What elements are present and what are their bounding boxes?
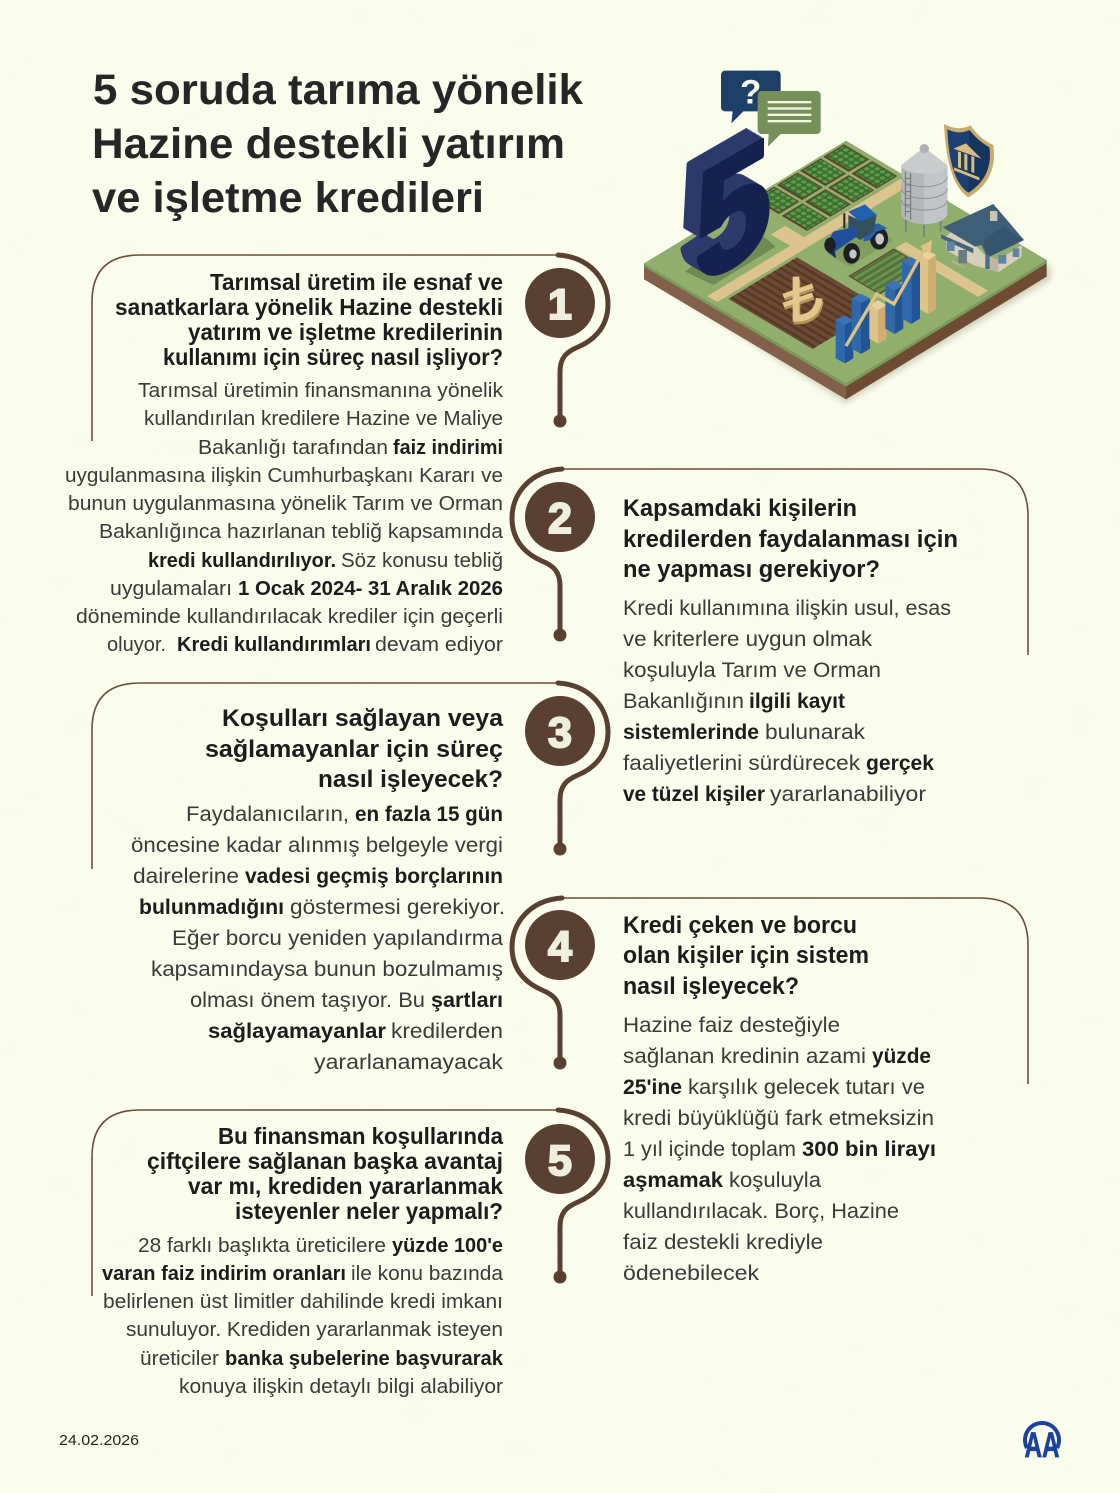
number five: 5 [678,92,755,311]
question 3: Koşulları sağlayan veya [222,705,504,732]
frame 2 [512,469,1028,655]
question 4 [623,912,869,1000]
small front wheel [824,238,836,252]
question 5: Bu finansman koşullarında [218,1123,503,1149]
question 4: olan kişiler için sistem [623,942,869,969]
answer 1: Kredi kullandırımları [177,634,371,656]
answer 3: olması önem taşıyor. Bu [190,989,425,1012]
answer 2: ve kriterlere uygun olmak [623,628,873,651]
hood [827,227,857,252]
badge 1 [525,268,595,338]
answer 1: Söz konusu tebliğ [341,550,503,572]
number five: 5 [680,94,757,312]
answer 5: konuya ilişkin detaylı bilgi alabiliyor [179,1376,503,1398]
answer 3 [131,803,505,1074]
question 1: Tarımsal üretim ile esnaf ve [210,269,503,295]
answer 2: sistemlerinde [623,721,759,744]
number five: 5 [688,98,765,317]
answer 1: oluyor. [107,634,166,656]
number five: 5 [692,101,769,319]
bar chart with arrow [836,240,936,363]
title: ve işletme kredileri [92,174,484,222]
panel 4 [512,898,1028,1285]
answer 1: uygulanmasına ilişkin Cumhurbaşkanı Kararı ve [65,465,503,487]
number five: 5 [684,96,761,315]
answer 4: kredi büyüklüğü fark etmeksizin [623,1107,934,1130]
answer 5: üreticiler [140,1348,219,1370]
answer 4: 300 bin lirayı [802,1138,936,1161]
answer 3: bulunmadığını [139,896,284,919]
rear fender and cab [863,223,887,242]
title [92,66,583,222]
answer 5: belirlenen üst limitler dahilinde kredi imkanı [103,1291,503,1313]
answer 3: en fazla 15 gün [355,803,503,826]
illustration: isometric farm [644,71,1051,403]
answer 4: yüzde [872,1045,931,1068]
answer 1: uygulamaları [110,578,232,600]
answer 2: faaliyetlerini sürdürecek [623,752,861,775]
young crop patch [849,249,924,294]
title: 5 soruda tarıma yönelik [93,66,583,114]
answer 4: aşmamak [623,1169,723,1192]
answer 3: göstermesi gerekiyor. [290,896,505,919]
answer 3: Faydalanıcıların, [186,803,349,826]
shield with bank [944,124,994,197]
answer 4 [623,1014,936,1285]
answer 3: şartları [431,989,503,1012]
answer 3: kredilerden [391,1020,503,1043]
panel 3 [92,683,608,1074]
answer 2: yararlanabiliyor [770,783,926,806]
panel 5 [92,1110,608,1398]
panel 1 [65,255,608,656]
number five: 5 [686,97,763,316]
platform grass top [644,141,1047,383]
answer 1: 1 Ocak 2024- 31 Aralık 2026 [238,578,503,600]
answer 2: bulunarak [765,721,866,744]
answer 2: Kredi kullanımına ilişkin usul, esas [623,597,951,620]
answer 3: vadesi geçmiş borçlarının [245,865,503,888]
answer 1 [65,380,504,656]
number five: 5 [690,99,767,318]
answer 4: Hazine faiz desteğiyle [623,1014,840,1037]
answer 5: 28 farklı başlıkta üreticilere [138,1235,386,1257]
answer 4: kullandırılacak. Borç, Hazine [623,1200,899,1223]
badge 3 [525,696,595,766]
answer 5 [102,1235,504,1398]
silo [901,144,947,237]
lira symbol [783,277,820,321]
question 4: nasıl işleyecek? [623,973,799,1000]
answer 5: ile konu bazında [351,1263,504,1285]
badge 5 [525,1124,595,1194]
answer 3: dairelerine [133,865,239,888]
farmhouse [941,204,1024,272]
badge 1: 1 [548,281,572,329]
answer 2 [623,597,951,806]
speech bubbles: ? [740,73,761,111]
badge 2 [525,482,595,552]
answer 4: ödenebilecek [623,1262,760,1285]
rear wheel [870,227,888,250]
frame 5 [92,1110,608,1296]
frame 3 [92,683,608,869]
answer 4: 25'ine [623,1076,682,1099]
ploughed field [728,257,881,349]
answer 3: öncesine kadar alınmış belgeyle vergi [131,834,503,857]
question 5 [147,1123,503,1224]
question 2 [623,495,958,583]
answer 4: 1 yıl içinde toplam [623,1138,796,1161]
answer 2: gerçek [866,752,934,775]
answer 3: yararlanamayacak [314,1051,504,1074]
house walls [946,228,1022,272]
answer 4: koşuluyla [729,1169,821,1192]
speech bubbles [721,71,821,147]
answer 4: karşılık gelecek tutarı ve [688,1076,925,1099]
roads [688,167,1039,378]
badge 4: 4 [548,923,572,971]
frame 4 [512,898,1028,1084]
answer 3: sağlayamayanlar [208,1020,386,1043]
answer 5: banka şubelerine başvurarak [225,1348,504,1370]
answer 2: koşuluyla Tarım ve Orman [623,659,881,682]
title: Hazine destekli yatırım [92,120,565,168]
question 5: isteyenler neler yapmalı? [235,1198,503,1224]
question 1: sanatkarlara yönelik Hazine destekli [115,294,503,320]
tractor [824,204,893,267]
answer 2: ilgili kayıt [749,690,845,713]
question 1: yatırım ve işletme kredilerinin [188,319,503,345]
badge 2: 2 [548,495,572,543]
question 3: sağlamayanlar için süreç [205,736,503,763]
AA logo [1024,1423,1060,1465]
question 3 [205,705,504,793]
number five: 5 [695,102,771,321]
answer 5: varan faiz indirim oranları [102,1263,346,1285]
answer 1: döneminde kullandırılacak krediler için geçerli [76,606,503,628]
question 5: çiftçilere sağlanan başka avantaj [147,1148,503,1174]
roof [943,204,1024,258]
answer 3: kapsamındaysa bunun bozulmamış [151,958,503,981]
question 1: kullanımı için süreç nasıl işliyor? [163,344,503,370]
frame 1 [92,255,608,441]
answer 2: Bakanlığının [623,690,744,713]
answer 3: Eğer borcu yeniden yapılandırma [172,927,503,950]
date: 24.02.2026 [59,1432,139,1449]
question 2: Kapsamdaki kişilerin [623,495,857,522]
answer 1: bunun uygulanmasına yönelik Tarım ve Orman [68,493,503,515]
question 4: Kredi çeken ve borcu [623,912,857,939]
answer 1: Bakanlığı tarafından [198,437,388,459]
AA logo: AA [1024,1426,1060,1465]
question 3: nasıl işleyecek? [318,766,503,793]
question 1 [115,269,503,370]
question 2: kredilerden faydalanması için [623,526,958,553]
badge 5: 5 [548,1137,572,1185]
badge 4 [525,910,595,980]
answer 5: sunuluyor. Krediden yararlanmak isteyen [126,1319,503,1341]
number five: 5 [682,95,759,313]
crop plots [754,144,897,231]
panel 2 [512,469,1028,806]
answer 1: faiz indirimi [393,437,503,459]
porch roof [941,234,973,253]
answer 4: faiz destekli krediyle [623,1231,823,1254]
fields and roads on ground plane [650,144,1039,378]
answer 2: ve tüzel kişiler [623,783,765,806]
question 2: ne yapması gerekiyor? [623,556,880,583]
platform shadow [650,263,1051,403]
answer 1: Tarımsal üretimin finansmanına yönelik [138,380,504,402]
platform soil sides [644,260,1047,399]
windows and door [947,242,1019,269]
answer 1: kullandırılan kredilere Hazine ve Maliye [144,408,503,430]
shadow under number five [685,235,776,285]
badge 3: 3 [548,709,572,757]
answer 1: kredi kullandırılıyor. [148,550,336,572]
answer 1: devam ediyor [375,634,503,656]
answer 5: yüzde 100'e [392,1235,503,1257]
answer 4: sağlanan kredinin azami [623,1045,866,1068]
question 5: var mı, krediden yararlanmak [188,1173,503,1199]
front big wheel [843,243,860,264]
answer 1: Bakanlığınca hazırlanan tebliğ kapsamında [99,521,504,543]
